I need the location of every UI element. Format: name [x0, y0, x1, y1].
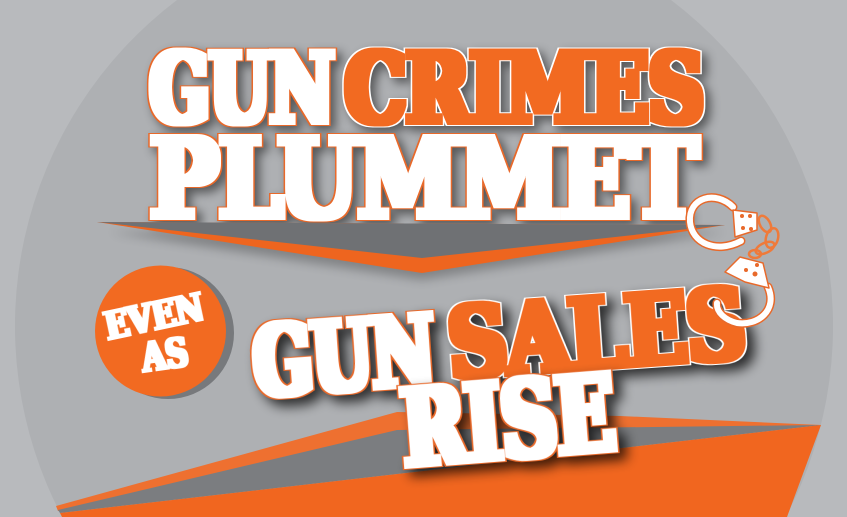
- title line: gun crimes: GUN: [150, 32, 334, 145]
- even as badge: [95, 266, 234, 399]
- chain: [749, 214, 780, 258]
- title line: gun sales: SALES: [445, 267, 749, 401]
- title line: plummet: PLUMMET: [150, 114, 698, 243]
- title line: rise: RISE: [397, 350, 619, 491]
- badge text: even: EVEN: [101, 284, 208, 349]
- title line: gun crimes: CRIMES: [345, 32, 704, 145]
- lower cuff: [717, 257, 771, 323]
- icon: handcuffs: [690, 198, 780, 323]
- title line: gun sales: [250, 267, 749, 419]
- upper cuff: [690, 198, 757, 247]
- title line: gun sales: GUN: [250, 294, 438, 419]
- bottom ribbon: [56, 412, 821, 517]
- downward arrow banner: [97, 222, 725, 280]
- badge text: as: AS: [138, 329, 191, 382]
- title line: gun crimes: [150, 32, 704, 145]
